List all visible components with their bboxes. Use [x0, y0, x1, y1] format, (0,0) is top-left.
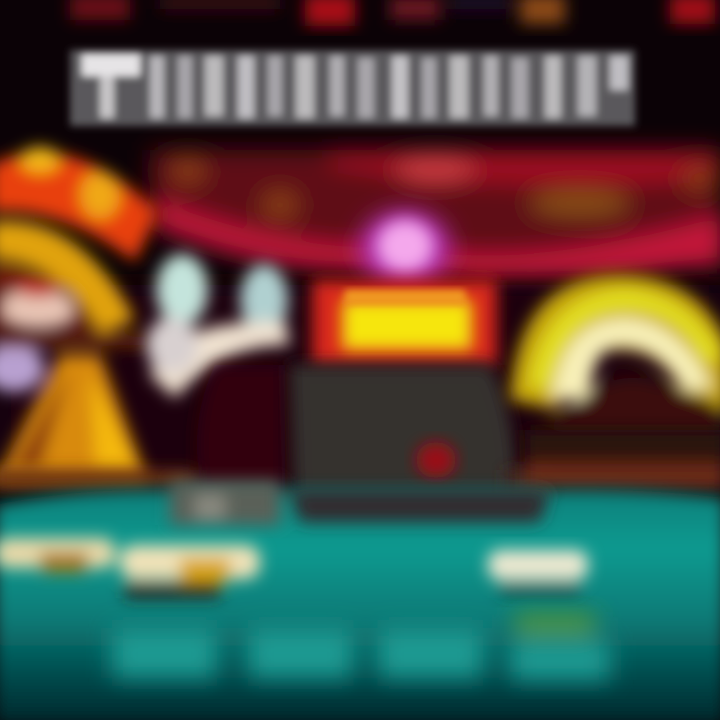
- wooden table rail: [0, 430, 720, 490]
- icon: glowing rainbow arch: [510, 275, 720, 432]
- dark lower wall: [0, 285, 720, 490]
- slot machine: dark body: [197, 365, 550, 515]
- backdrop: red curtain band: [150, 150, 720, 285]
- icon: carousel tent left: [0, 147, 158, 482]
- left chip stacks: [0, 538, 260, 598]
- icon: glowing pink orb: [359, 210, 451, 286]
- slot machine: yellow screen: [312, 280, 497, 365]
- table: teal felt: [0, 490, 720, 720]
- right chip stack: [488, 550, 588, 594]
- central machine base: [170, 480, 550, 525]
- title: illegible blurred heading: [70, 50, 635, 126]
- table labels: illegible blurred text: [112, 615, 610, 680]
- icon: white slot figure: [146, 254, 290, 398]
- top lights strip: [70, 0, 715, 26]
